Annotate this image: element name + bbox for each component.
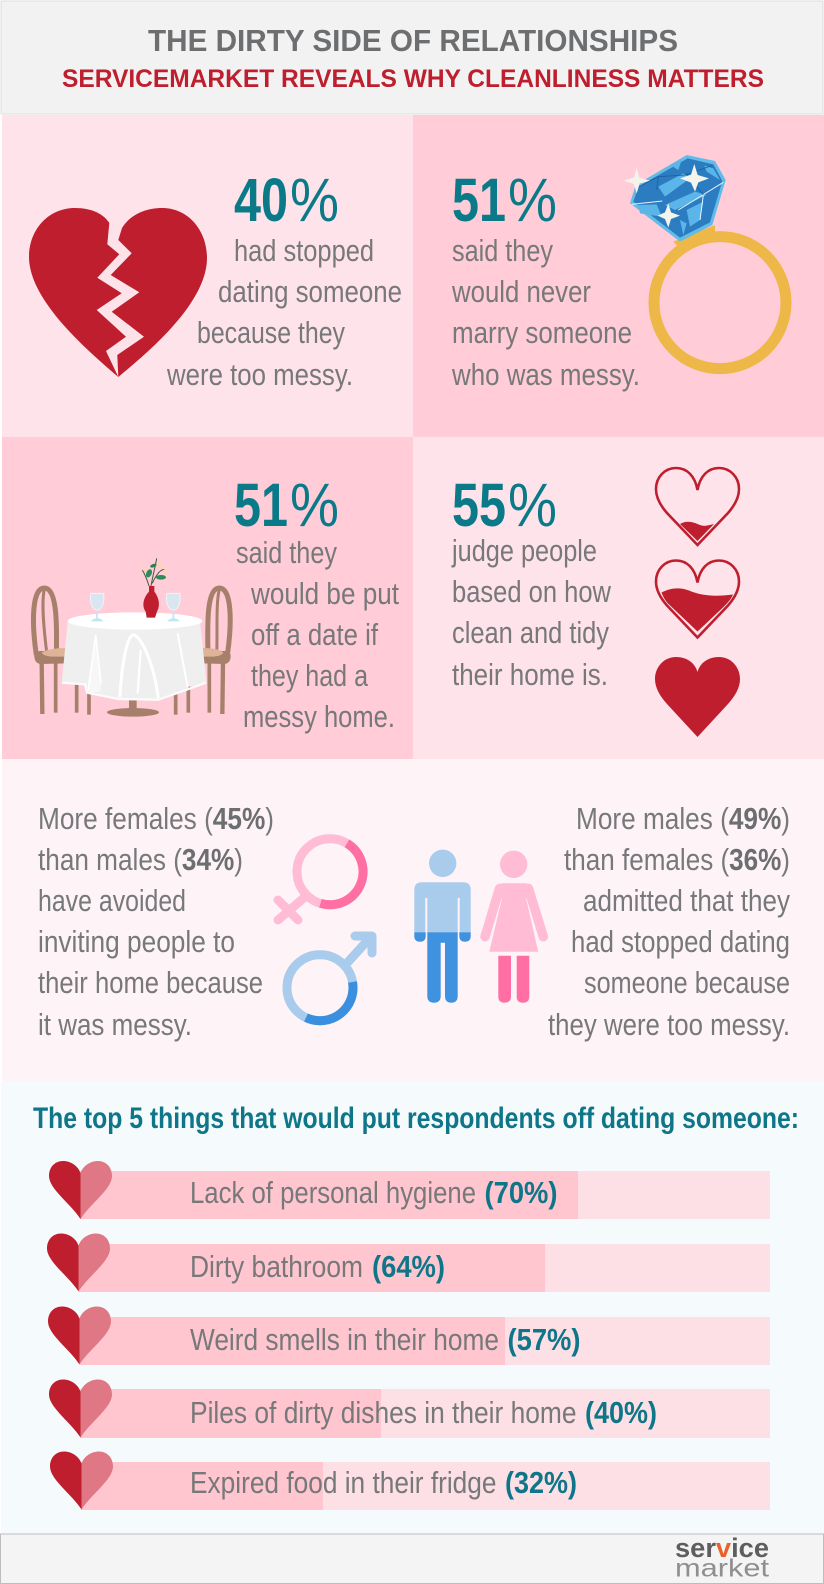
text: females vs males avoiding visitors: than males (34%) xyxy=(38,843,243,877)
bar: dirty dishes: (40%) xyxy=(585,1396,657,1430)
text: females vs males avoiding visitors: inviting people to xyxy=(38,925,235,959)
text: males vs females stopped dating: had stopped dating xyxy=(571,925,790,959)
icon: man figure xyxy=(414,850,471,1003)
icon: broken heart xyxy=(29,208,207,377)
text: put off a date description: they had a xyxy=(251,659,368,693)
text: females vs males avoiding visitors: have avoided xyxy=(38,884,186,918)
bar: expired food: Expired food in their fridge xyxy=(190,1466,496,1500)
bar: expired food xyxy=(50,1452,770,1510)
stat: 55%: % xyxy=(508,471,557,539)
icon: dining table xyxy=(33,558,231,717)
bar: dirty bathroom: (64%) xyxy=(372,1250,445,1284)
text: males vs females stopped dating xyxy=(548,802,791,1042)
stat: 51% put off: % xyxy=(290,471,339,539)
text: males vs females stopped dating: admitted that they xyxy=(583,884,791,918)
stat: 51% put off xyxy=(234,471,339,539)
text: females vs males avoiding visitors: their home because xyxy=(38,966,263,1000)
text: judge people description: clean and tidy xyxy=(452,616,610,650)
stat: 51% never marry: 51 xyxy=(452,166,506,234)
stat: 51% never marry: % xyxy=(508,166,557,234)
subtitle: SERVICEMARKET REVEALS WHY CLEANLINESS MATTERS xyxy=(62,65,764,93)
text: never marry description: marry someone xyxy=(452,316,632,350)
logo: servicemarket: service xyxy=(675,1533,769,1563)
stat: 40%: % xyxy=(290,166,339,234)
panel: judge people stat xyxy=(413,437,824,759)
bar: dirty bathroom: Dirty bathroom xyxy=(190,1250,363,1284)
stat: 40%: 40 xyxy=(234,166,288,234)
icon: heart full xyxy=(655,657,740,737)
stat: 51% put off: 51 xyxy=(234,471,288,539)
text: stopped dating description: dating someone xyxy=(218,275,402,309)
logo: servicemarket: market xyxy=(675,1554,769,1582)
title: THE DIRTY SIDE OF RELATIONSHIPS xyxy=(148,23,678,58)
icon: heart one quarter full xyxy=(656,468,739,545)
panel: put off a date stat xyxy=(2,437,413,759)
text: never marry description xyxy=(451,234,640,392)
bar: weird smells: Weird smells in their home xyxy=(190,1323,499,1357)
text: stopped dating description: were too messy. xyxy=(166,358,353,392)
text: females vs males avoiding visitors xyxy=(38,802,274,1042)
text: judge people description: based on how xyxy=(452,575,612,609)
panel: top 5 turn-offs xyxy=(1,1082,824,1534)
panel: never marry stat xyxy=(413,115,824,437)
text: stopped dating description xyxy=(166,234,402,392)
text: males vs females stopped dating: than females (36%) xyxy=(564,843,790,877)
text: judge people description: judge people xyxy=(451,534,597,568)
text: never marry description: said they xyxy=(452,234,554,268)
text: put off a date description: off a date if xyxy=(251,618,378,652)
footer xyxy=(0,1533,824,1584)
icon: heart half full xyxy=(656,560,739,638)
stat: 40% xyxy=(234,166,339,234)
bar: dirty dishes xyxy=(49,1380,770,1438)
text: put off a date description: messy home. xyxy=(243,700,395,734)
text: females vs males avoiding visitors: More females (45%) xyxy=(38,802,274,836)
panel: stopped dating stat xyxy=(2,115,413,437)
text: put off a date description xyxy=(236,536,399,734)
bar: personal hygiene: (70%) xyxy=(484,1176,558,1210)
text: never marry description: who was messy. xyxy=(451,358,640,392)
text: put off a date description: would be put xyxy=(250,577,399,611)
bar: expired food: (32%) xyxy=(505,1466,577,1500)
stat: 51% never marry xyxy=(452,166,557,234)
icon: male symbol xyxy=(287,936,372,1021)
text: females vs males avoiding visitors: it was messy. xyxy=(38,1008,192,1042)
text: stopped dating description: had stopped xyxy=(234,234,374,268)
bar: dirty bathroom xyxy=(47,1234,770,1292)
bar: personal hygiene xyxy=(49,1161,770,1219)
bar chart xyxy=(47,1161,770,1510)
text: judge people description xyxy=(451,534,612,692)
icon: woman figure xyxy=(485,851,543,1003)
bar: personal hygiene: Lack of personal hygiene xyxy=(190,1176,476,1210)
text: males vs females stopped dating: More males (49%) xyxy=(576,802,790,836)
stat: 55%: 55 xyxy=(452,471,506,539)
text: judge people description: their home is. xyxy=(452,658,608,692)
bar: dirty dishes: Piles of dirty dishes in their home xyxy=(190,1396,576,1430)
bar: weird smells xyxy=(48,1306,770,1365)
logo: servicemarket xyxy=(675,1533,769,1582)
text: never marry description: would never xyxy=(451,275,591,309)
stat: 55% xyxy=(452,471,557,539)
icon: diamond ring xyxy=(624,155,786,369)
text: stopped dating description: because they xyxy=(197,316,346,350)
bar: weird smells: (57%) xyxy=(508,1323,580,1357)
text: put off a date description: said they xyxy=(236,536,338,570)
panel: gender comparison xyxy=(2,759,824,1082)
icon: female symbol xyxy=(278,839,363,920)
header panel xyxy=(1,1,823,114)
